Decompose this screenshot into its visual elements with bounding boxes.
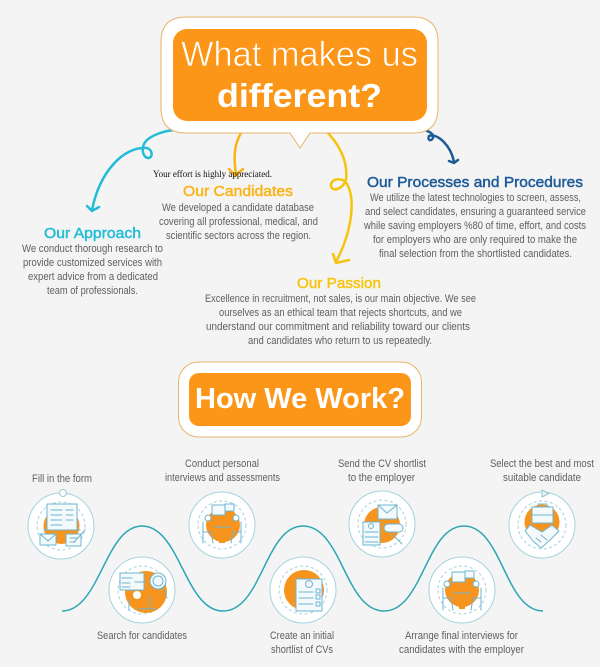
process wave line [62,526,543,611]
heading: How We Work: How We Work? [195,383,405,415]
step 3: conduct personal interviews: Conduct personal [185,458,259,470]
text block: Our Processes and Procedures [363,175,586,260]
arrow: yellow to Our Candidates [229,133,243,176]
arrow: blue to Our Processes and Procedures [425,130,458,163]
step 1: fill in the form: Fill in the form [32,473,92,485]
title speech bubble [161,17,438,148]
step 4: create an initial shortlist: Create an initial [270,630,334,642]
text block: Our Processes and Procedures: Our Processes and Procedures [367,175,583,191]
arrow: yellow to Our Passion [328,133,352,263]
step 5: send the CV shortlist [338,458,426,557]
text block: Our Approach [22,226,163,297]
text block: Our Processes and Procedures: final selection from the shortlisted candidates. [379,248,572,260]
text block: Our Approach: Our Approach [44,226,141,242]
step 3: conduct personal interviews [165,458,280,558]
text block: Our Candidates: covering all professional, medical, and [159,216,318,228]
step 2: search for candidates [97,557,187,642]
text block: Our Passion: Our Passion [297,276,381,292]
text block: Our Candidates [159,184,318,242]
step 2: search for candidates: Search for candidates [97,630,187,642]
text block: Our Passion: Excellence in recruitment, not sales, is our main objective. We see [205,293,476,305]
text block: Our Passion: understand our commitment and reliability toward our clients [206,321,470,333]
step 5: send the CV shortlist: Send the CV shortlist [338,458,426,470]
text block: Our Approach: expert advice from a dedicated [28,271,158,283]
step 5: send the CV shortlist: to the employer [348,472,415,484]
step 3: conduct personal interviews: interviews and assessments [165,472,280,484]
title line 1: What makes us [181,35,418,74]
text block: Our Passion [205,276,476,347]
title line 2: different? [217,77,382,114]
step 4: create an initial shortlist [270,557,336,656]
text block: Our Approach: We conduct thorough research to [22,243,163,255]
text block: Our Passion: ourselves as an ethical team that rejects shortcuts, and we [219,307,462,319]
arrow: teal to Our Approach [87,130,175,211]
step 6: arrange final interviews: candidates with the employer [399,644,524,656]
text block: Our Candidates: We developed a candidate database [162,202,314,214]
stray note: Your effort is highly appreciated. [153,169,272,180]
step 7: select the best candidate [490,458,594,558]
text block: Our Approach: provide customized services with [23,257,162,269]
text block: Our Candidates: scientific sectors across the region. [166,230,311,242]
text block: Our Candidates: Our Candidates [183,184,293,200]
step 1: fill in the form [28,473,94,559]
heading: How We Work [178,362,422,437]
step 7: select the best candidate: suitable candidate [503,472,581,484]
text block: Our Approach: team of professionals. [47,285,138,297]
step 4: create an initial shortlist: shortlist of CVs [271,644,333,656]
text block: Our Passion: and candidates who return to us repeatedly. [248,335,432,347]
step 6: arrange final interviews [399,557,524,656]
step 6: arrange final interviews: Arrange final interviews for [405,630,518,642]
